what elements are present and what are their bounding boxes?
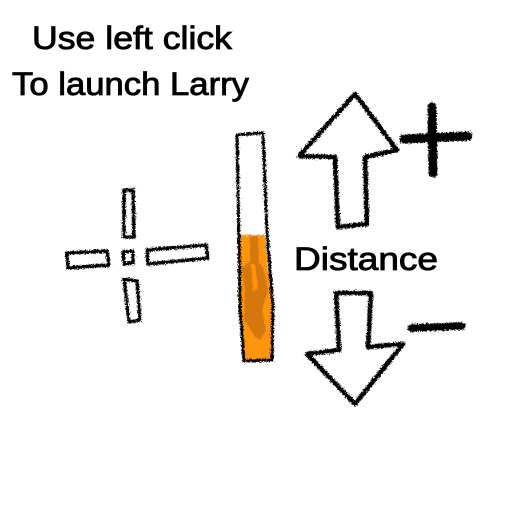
title: launch instruction xyxy=(12,20,249,102)
icon: crosshair xyxy=(67,190,208,322)
distance gauge xyxy=(237,133,274,361)
icon: plus sign xyxy=(404,107,468,173)
label: distance: Distance xyxy=(294,241,438,277)
gauge orange fill xyxy=(238,235,274,361)
title: launch instruction: To launch Larry xyxy=(12,66,249,102)
title: launch instruction: Use left click xyxy=(32,20,233,56)
gauge outline xyxy=(237,133,273,361)
icon: up arrow xyxy=(299,94,397,227)
icon: down arrow xyxy=(307,293,403,404)
icon: minus sign xyxy=(411,326,462,328)
